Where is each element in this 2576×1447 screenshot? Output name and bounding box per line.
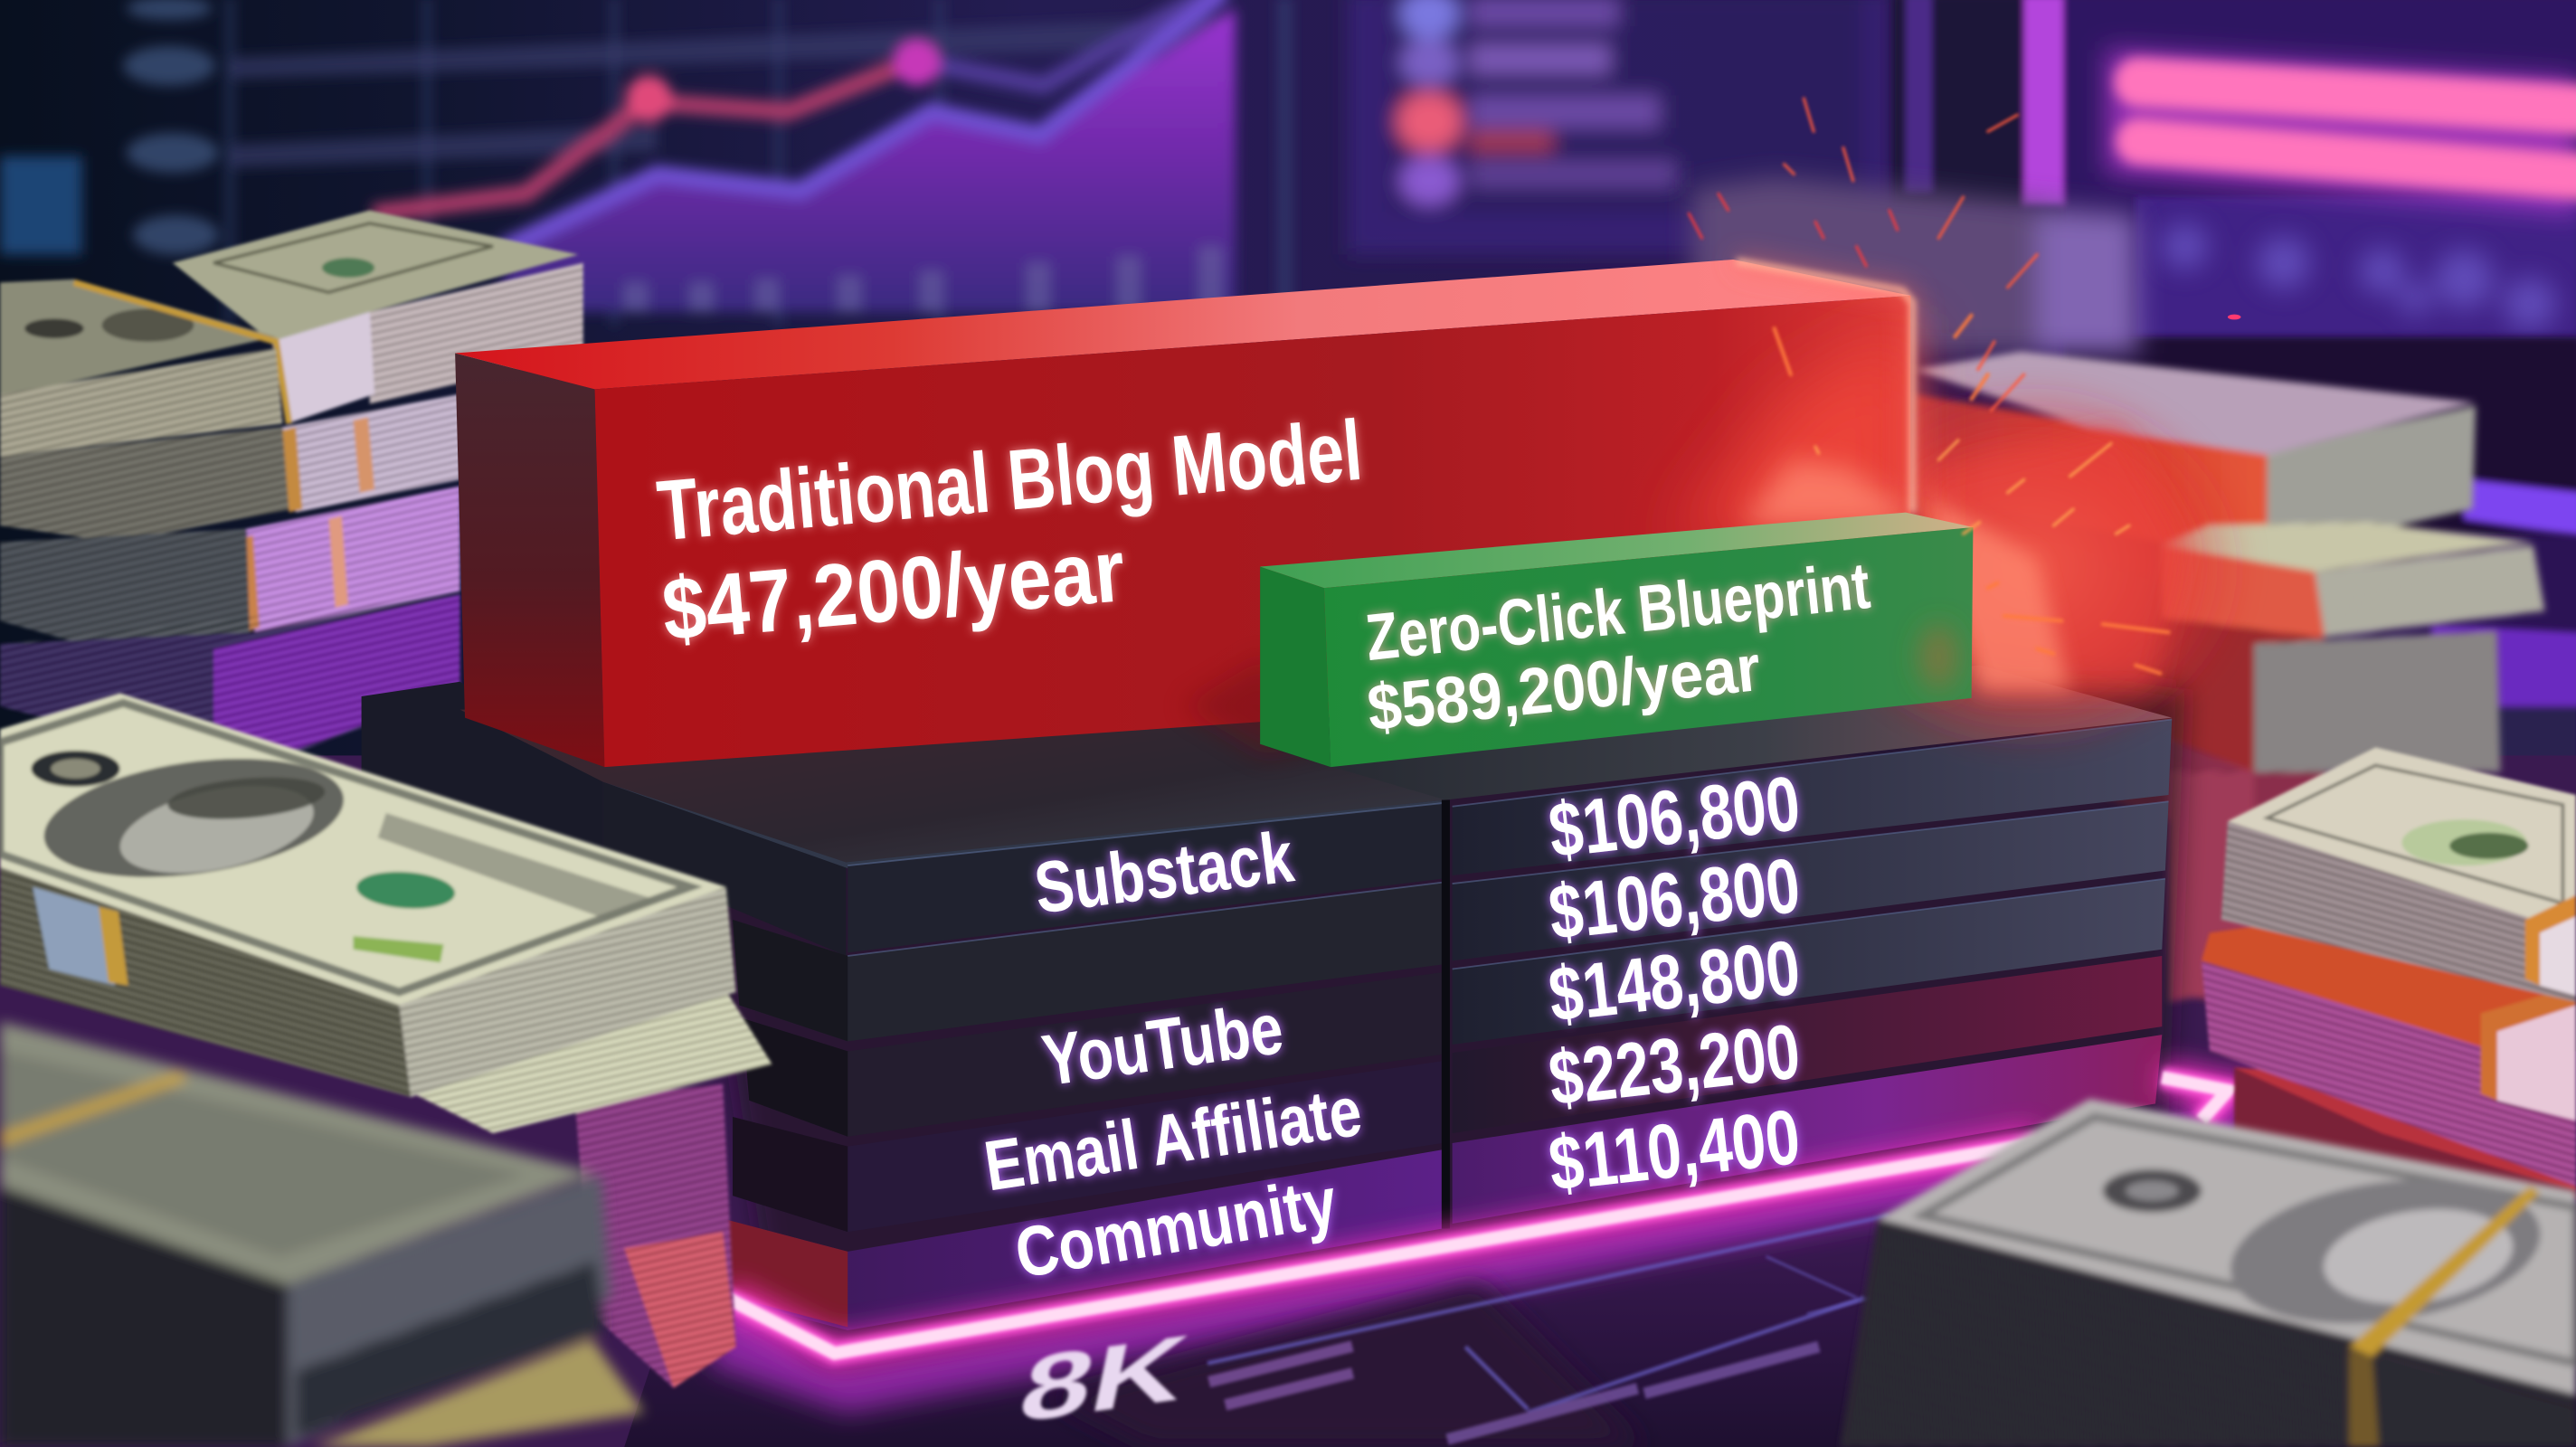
platform: stacked tiers xyxy=(362,657,2185,1363)
background money stack, upper right xyxy=(1692,177,2544,1018)
right tiers xyxy=(1453,719,2172,875)
label: Zero-Click Blueprint: Zero-Click Blueprint xyxy=(1362,549,1873,675)
label: Zero-Click Blueprint xyxy=(1362,549,1873,745)
bar: Zero-Click Blueprint (green block) xyxy=(1260,513,1973,767)
label: YouTube: YouTube xyxy=(1037,988,1288,1101)
gray pages xyxy=(2268,406,2476,555)
floor xyxy=(0,755,2576,1447)
stack side pages: red xyxy=(2037,501,2326,1018)
left tiers xyxy=(733,882,1445,1041)
money stack, right bottom (blurred foreground) xyxy=(1840,1099,2576,1447)
neon glow base line xyxy=(726,1077,2228,1353)
right column revenue values xyxy=(1545,761,1804,1208)
value: second row $106,800: $106,800 xyxy=(1545,843,1804,957)
floor print details xyxy=(1208,1215,1889,1445)
left column channel labels xyxy=(980,816,1367,1293)
money stack, left bottom (blurred foreground) xyxy=(0,1022,644,1447)
label: Zero-Click Blueprint: $589,200/year xyxy=(1364,631,1764,745)
value: Community $110,400: $110,400 xyxy=(1545,1094,1804,1208)
label: 8K floor mark: 8K xyxy=(1011,1315,1196,1442)
platform top surface xyxy=(460,703,1445,864)
label: Community: Community xyxy=(1009,1161,1342,1293)
explosion behind the blocks xyxy=(1807,378,2250,755)
label: Traditional Blog Model: $47,200/year xyxy=(658,520,1129,659)
money stack, right middle xyxy=(2202,747,2576,1199)
money stack, upper left xyxy=(0,210,583,772)
panel: pillars and neon bars xyxy=(1892,0,2576,772)
panel: blurred list xyxy=(1347,0,1889,254)
back plate left xyxy=(362,682,603,854)
value: Substack $106,800: $106,800 xyxy=(1545,761,1804,875)
money stack, left middle with portrait xyxy=(0,693,772,1388)
label: Traditional Blog Model: Traditional Blog Model xyxy=(654,403,1366,559)
bar: Traditional Blog Model (red block) xyxy=(455,260,1912,767)
panel: blurred line chart xyxy=(0,0,1292,326)
value: YouTube $148,800: $148,800 xyxy=(1545,925,1804,1039)
sparks xyxy=(1689,99,2169,674)
value: Email Affiliate $223,200: $223,200 xyxy=(1545,1008,1804,1122)
label: Traditional Blog Model xyxy=(654,403,1366,659)
label: Substack: Substack xyxy=(1030,816,1298,929)
label: Email Affiliate: Email Affiliate xyxy=(980,1071,1367,1206)
